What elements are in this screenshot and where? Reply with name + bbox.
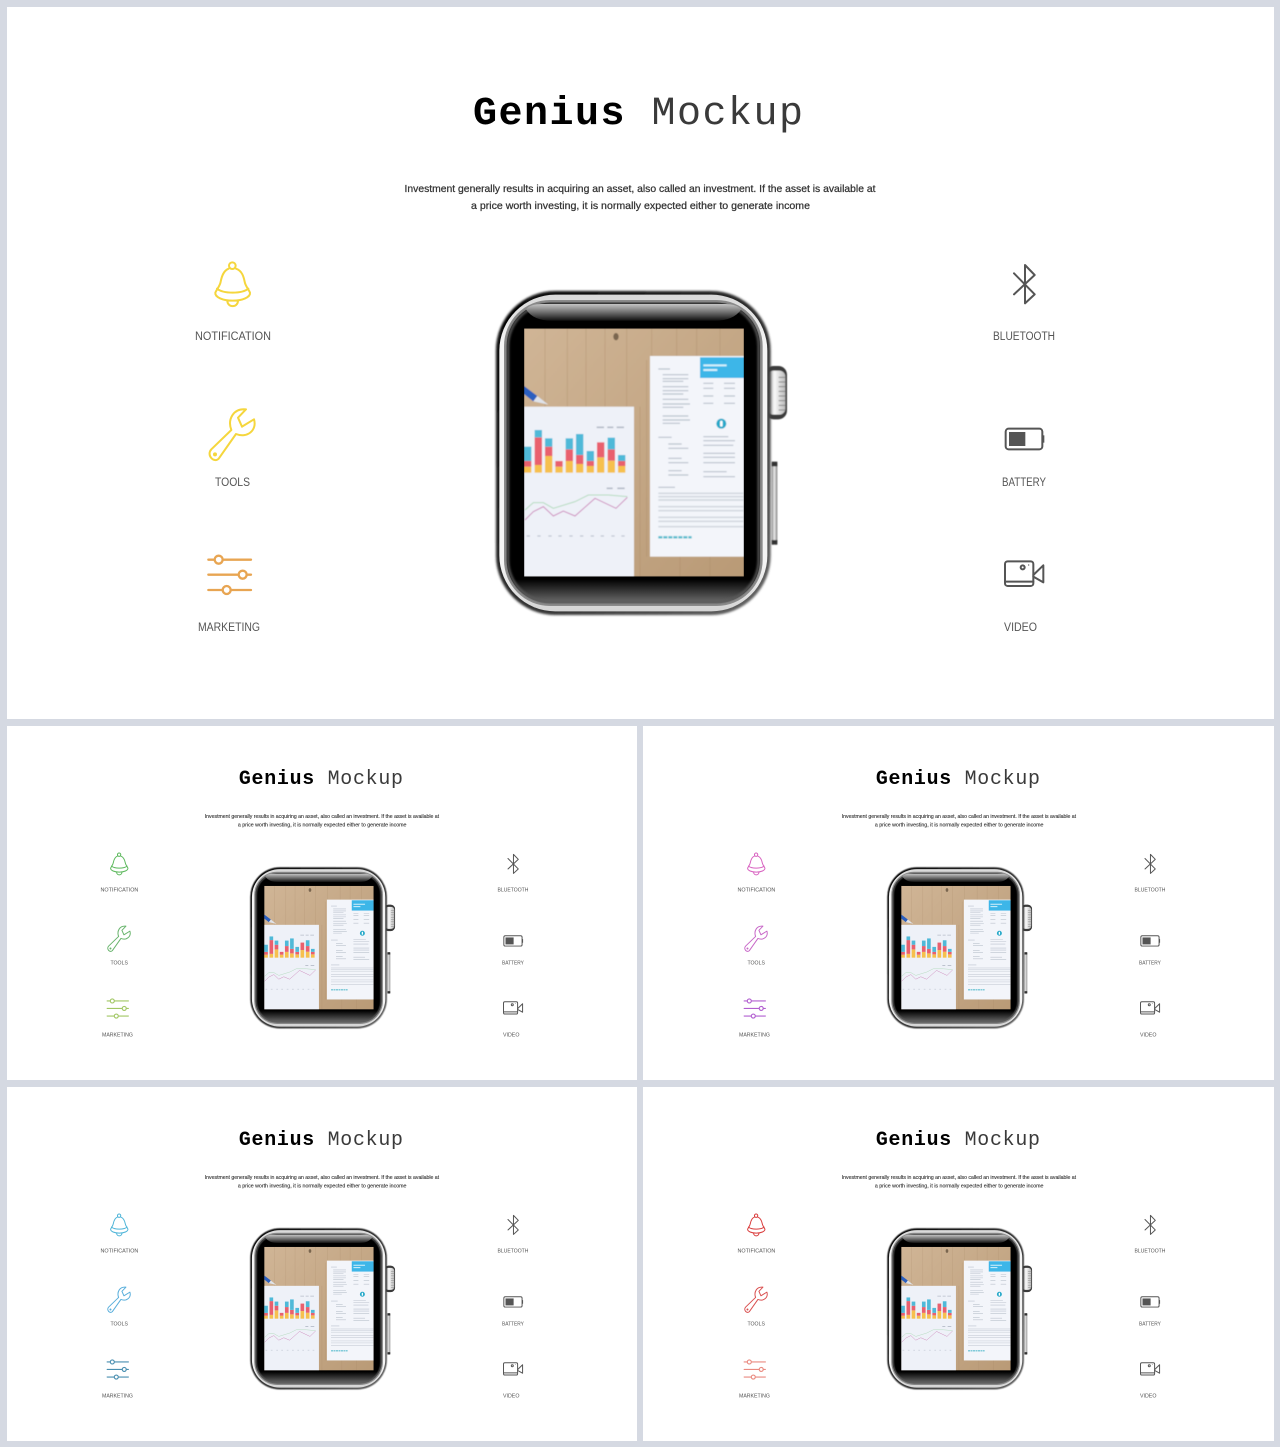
red slide content: [738, 1128, 1165, 1399]
label: battery: BATTERY: [502, 1321, 524, 1327]
icon: video camera: [1141, 1002, 1160, 1014]
icon: notification bell: [215, 262, 250, 306]
icon: marketing sliders: [744, 1360, 765, 1379]
title: Genius Mockup: [876, 767, 1041, 790]
icon: video camera: [504, 1002, 523, 1014]
label: video: VIDEO: [503, 1032, 520, 1038]
icon: notification bell: [111, 1214, 128, 1236]
watch mockup: [250, 867, 395, 1028]
description text: a price worth investing, it is normally expected either to generate income: [875, 1183, 1044, 1189]
label: battery: BATTERY: [1002, 477, 1046, 489]
icon: bluetooth: [1014, 265, 1035, 303]
label: bluetooth: BLUETOOTH: [498, 888, 528, 894]
icon: notification bell: [111, 853, 128, 875]
label: tools: TOOLS: [110, 960, 128, 966]
icon: bluetooth: [1145, 1215, 1155, 1234]
icon: bluetooth: [1145, 854, 1155, 873]
description text: a price worth investing, it is normally expected either to generate income: [238, 1183, 407, 1189]
watch mockup: [887, 867, 1032, 1028]
green slide content: [101, 767, 528, 1038]
description text: [842, 1175, 1077, 1189]
title: Genius Mockup: [473, 92, 805, 137]
label: notification: NOTIFICATION: [195, 331, 271, 343]
label: video: VIDEO: [1140, 1393, 1157, 1399]
icon: tools wrench: [745, 926, 767, 951]
icon: video camera: [1141, 1363, 1160, 1375]
label: marketing: MARKETING: [198, 622, 260, 634]
description text: Investment generally results in acquiring an asset, also called an investment. If the asset is available at: [842, 814, 1077, 820]
purple slide background: [643, 726, 1274, 1080]
icon: battery: [504, 936, 523, 946]
icon: marketing sliders: [107, 999, 128, 1018]
description text: a price worth investing, it is normally expected either to generate income: [471, 200, 810, 212]
icon: video camera: [504, 1363, 523, 1375]
green slide background: [7, 726, 637, 1080]
title: Genius Mockup: [876, 1128, 1041, 1151]
icon: tools wrench: [108, 1287, 130, 1312]
label: notification: NOTIFICATION: [101, 888, 138, 894]
description text: a price worth investing, it is normally expected either to generate income: [875, 822, 1044, 828]
description text: Investment generally results in acquiring an asset, also called an investment. If the asset is available at: [842, 1175, 1077, 1181]
panel: red variant slide: [643, 1087, 1274, 1441]
label: battery: BATTERY: [502, 960, 524, 966]
description text: Investment generally results in acquiring an asset, also called an investment. If the asset is available at: [404, 183, 876, 195]
panel: purple variant slide: [643, 726, 1274, 1080]
description text: [205, 1175, 440, 1189]
label: tools: TOOLS: [747, 960, 765, 966]
purple slide content: [738, 767, 1165, 1038]
label: video: VIDEO: [1004, 622, 1037, 634]
icon: tools wrench: [108, 926, 130, 951]
label: marketing: MARKETING: [102, 1032, 133, 1038]
icon: battery: [1141, 1297, 1160, 1307]
watch mockup: [887, 1228, 1032, 1389]
blue slide content: [101, 1128, 528, 1399]
label: notification: NOTIFICATION: [738, 1249, 775, 1255]
icon: battery: [504, 1297, 523, 1307]
label: video: VIDEO: [1140, 1032, 1157, 1038]
label: battery: BATTERY: [1139, 960, 1161, 966]
description text: Investment generally results in acquiring an asset, also called an investment. If the asset is available at: [205, 1175, 440, 1181]
description text: [842, 814, 1077, 828]
label: marketing: MARKETING: [102, 1393, 133, 1399]
icon: marketing sliders: [107, 1360, 128, 1379]
label: tools: TOOLS: [747, 1321, 765, 1327]
main slide background: [7, 7, 1274, 719]
red slide background: [643, 1087, 1274, 1441]
icon: notification bell: [748, 853, 765, 875]
description text: [205, 814, 440, 828]
icon: battery: [1006, 429, 1044, 449]
label: bluetooth: BLUETOOTH: [1135, 1249, 1165, 1255]
watch mockup: [250, 1228, 395, 1389]
icon: notification bell: [748, 1214, 765, 1236]
label: notification: NOTIFICATION: [738, 888, 775, 894]
icon: bluetooth: [508, 854, 518, 873]
icon: video camera: [1005, 561, 1043, 586]
title: Genius Mockup: [239, 767, 404, 790]
label: notification: NOTIFICATION: [101, 1249, 138, 1255]
description text: Investment generally results in acquiring an asset, also called an investment. If the asset is available at: [205, 814, 440, 820]
icon: marketing sliders: [744, 999, 765, 1018]
label: tools: TOOLS: [110, 1321, 128, 1327]
blue slide background: [7, 1087, 637, 1441]
label: bluetooth: BLUETOOTH: [993, 331, 1055, 343]
label: video: VIDEO: [503, 1393, 520, 1399]
icon: bluetooth: [508, 1215, 518, 1234]
icon: tools wrench: [210, 409, 255, 460]
icon: marketing sliders: [208, 556, 251, 594]
label: bluetooth: BLUETOOTH: [498, 1249, 528, 1255]
label: bluetooth: BLUETOOTH: [1135, 888, 1165, 894]
label: marketing: MARKETING: [739, 1393, 770, 1399]
label: tools: TOOLS: [215, 477, 250, 489]
icon: battery: [1141, 936, 1160, 946]
panel: blue variant slide: [7, 1087, 637, 1441]
title: Genius Mockup: [239, 1128, 404, 1151]
label: marketing: MARKETING: [739, 1032, 770, 1038]
panel: green variant slide: [7, 726, 637, 1080]
description text: a price worth investing, it is normally expected either to generate income: [238, 822, 407, 828]
description text: [404, 183, 876, 212]
icon: tools wrench: [745, 1287, 767, 1312]
label: battery: BATTERY: [1139, 1321, 1161, 1327]
watch mockup: [496, 291, 787, 615]
panel: main slide, yellow: [7, 7, 1274, 719]
